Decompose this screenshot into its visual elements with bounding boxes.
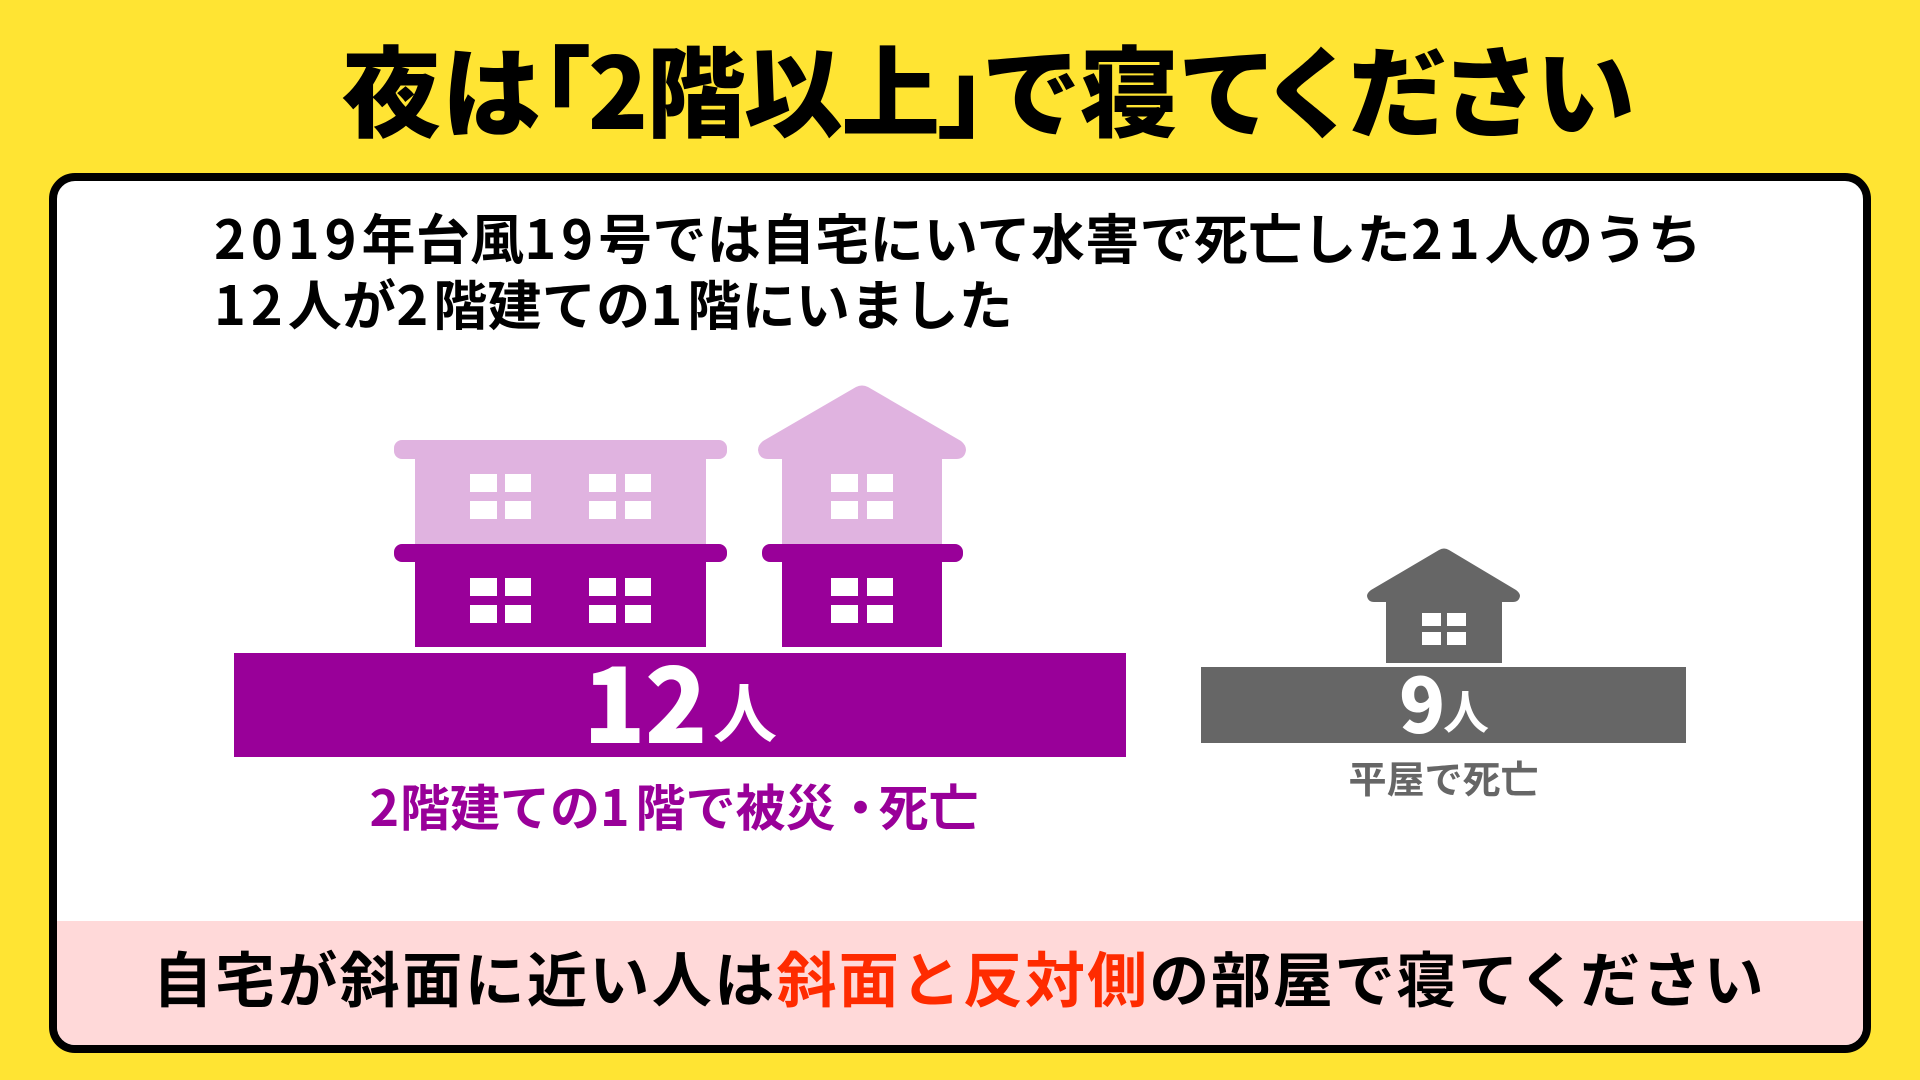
intro line 2: 12人が2階建ての1階にいました [214,262,1013,341]
bar: 12 people [234,653,1126,757]
panel: main white panel [49,173,1871,1053]
value: 9 people: 9 [1399,645,1445,755]
value: 9 people: 人 [1443,677,1489,743]
value: 9 people [1399,645,1489,755]
value: 12 people [583,624,777,773]
value: 12 people: 人 [713,664,777,756]
label: 9 people: 平屋で死亡 [1348,749,1538,804]
value: 12 people: 12 [583,624,706,773]
intro line 1: 2019年台風19号では自宅にいて水害で死亡した21人のうち [214,196,1702,275]
callout band [57,921,1863,1045]
bar: 9 people [1201,667,1686,743]
icon: one-storey house [1367,548,1520,663]
intro text [214,196,1702,341]
callout text: 自宅が斜面に近い人は斜面と反対側の部屋で寝てください [153,933,1765,1020]
title: 夜は「2階以上」で寝てください [342,14,1638,158]
label: 12 people: 2階建ての1階で被災・死亡 [370,769,978,841]
icon: two-storey wide building [394,440,727,647]
icon: two-storey house [758,386,966,647]
